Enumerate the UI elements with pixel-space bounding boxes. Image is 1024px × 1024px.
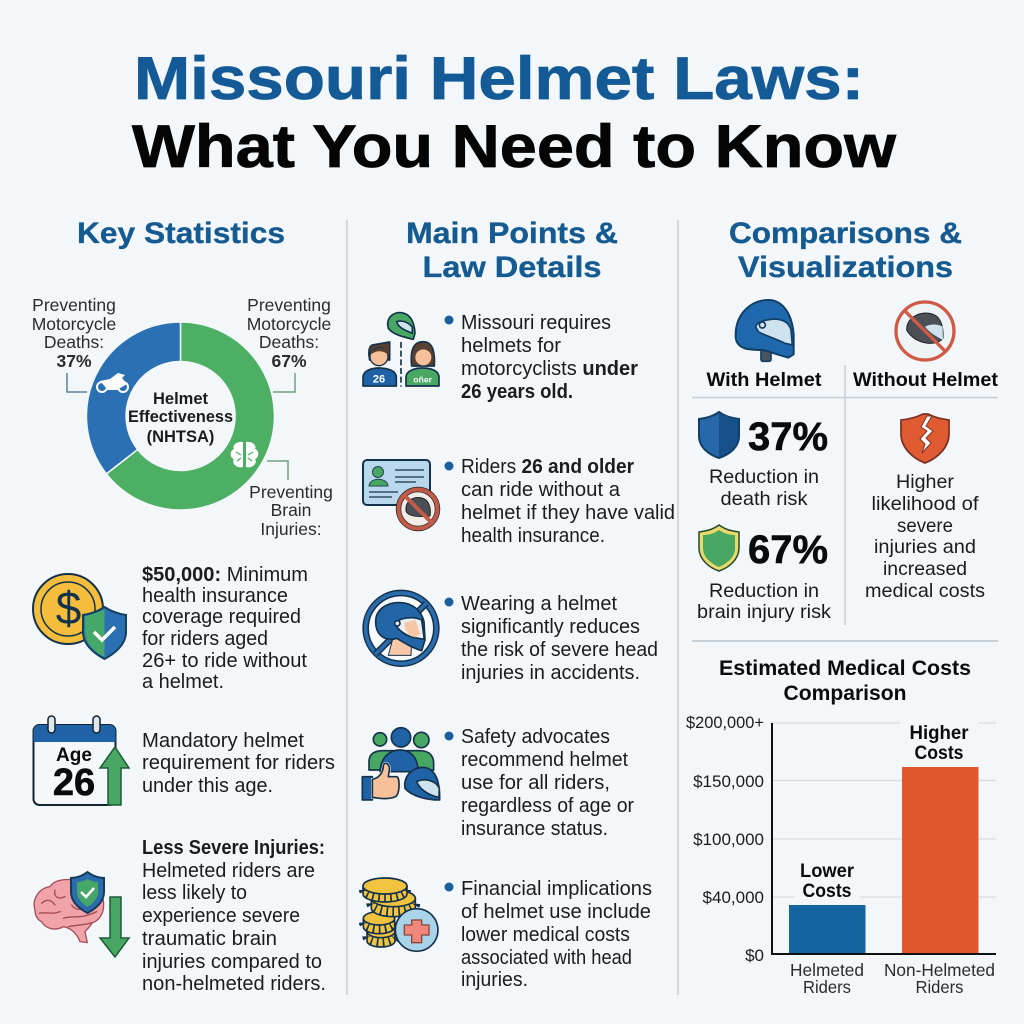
icon: coin and shield: $: [56, 582, 81, 634]
y axis labels: $200,000+: [686, 713, 764, 732]
panel: comparisons and visualizations: [686, 217, 999, 997]
chart title: Comparison: [784, 682, 906, 705]
label: brain injuries: Injuries:: [260, 519, 322, 539]
heading: comparisons: Comparisons &: [729, 217, 962, 250]
text: less severe injuries: non-helmeted riders.: [142, 973, 326, 995]
label: deaths 67%: [247, 295, 331, 371]
donut chart: helmet effectiveness: Helmet: [153, 390, 209, 408]
donut chart: helmet effectiveness: Effectiveness: [128, 408, 233, 426]
text: mandatory requirement: Mandatory helmet: [142, 730, 304, 752]
label: brain injuries: Brain: [271, 500, 311, 520]
bar value labels: Lower: [800, 861, 855, 882]
icon: age 26 calendar with up arrow: 26: [53, 762, 95, 804]
text: riders 26 and older: Riders 26 and older: [461, 456, 634, 478]
label: deaths 67%: 67%: [271, 351, 307, 371]
text: financial implications: injuries.: [461, 969, 528, 991]
x axis labels: Non-Helmeted: [884, 960, 995, 980]
y axis labels: $40,000: [703, 888, 764, 907]
stat: 67% reduction: 67%: [748, 528, 828, 572]
title: What You Need to Know: [132, 113, 896, 180]
x axis labels: Riders: [916, 977, 964, 997]
bar value labels: Costs: [802, 881, 852, 902]
text: without helmet consequence: [865, 471, 985, 602]
icon: coin and shield: [33, 574, 126, 659]
x axis labels: Riders: [803, 977, 851, 997]
y axis labels: $150,000: [693, 772, 764, 791]
text: safety advocates: recommend helmet: [461, 749, 628, 771]
text: riders 26 and older: health insurance.: [461, 525, 605, 547]
text: $50,000 coverage: [142, 564, 308, 693]
text: reduces head injuries: [461, 593, 658, 684]
text: without helmet consequence: Higher: [896, 471, 955, 493]
text: without helmet consequence: medical costs: [865, 580, 985, 602]
text: less severe injuries: less likely to: [142, 882, 247, 904]
icon: riders by age with helmet: 26: [373, 373, 385, 385]
stat: 37% reduction: [699, 412, 828, 510]
icon: age 26 calendar with up arrow: Age: [56, 745, 92, 766]
stat: 37% reduction: 37%: [748, 415, 828, 459]
text: safety advocates: Safety advocates: [461, 726, 610, 748]
bar value labels: [800, 723, 969, 902]
bar value labels: Costs: [914, 743, 964, 764]
donut chart: helmet effectiveness: (NHTSA): [147, 428, 214, 446]
icon: broken shield: [901, 414, 949, 463]
heading: main points: Law Details: [422, 251, 602, 284]
icon: brain: [231, 442, 258, 467]
label: deaths 37%: Deaths:: [44, 332, 104, 352]
panel: main points and law details: [362, 217, 675, 991]
heading: key statistics: Key Statistics: [77, 217, 285, 250]
x axis labels: Helmeted: [790, 960, 864, 980]
y axis labels: [686, 713, 764, 965]
text: financial implications: Financial implications: [461, 878, 652, 900]
icon: id card with no helmet: [363, 460, 438, 528]
title: [132, 45, 896, 180]
text: $50,000 coverage: health insurance: [142, 585, 288, 607]
bullet markers: [444, 316, 454, 892]
column heads: Without Helmet: [853, 370, 999, 391]
text: reduces head injuries: Wearing a helmet: [461, 593, 617, 615]
label: deaths 67%: Deaths:: [259, 332, 319, 352]
text: safety advocates: insurance status.: [461, 818, 608, 840]
heading: comparisons: Visualizations: [738, 251, 953, 284]
text: safety advocates: [461, 726, 634, 840]
text: financial implications: associated with head: [461, 947, 632, 969]
label: deaths 37%: 37%: [56, 351, 92, 371]
text: riders 26 and older: helmet if they have valid: [461, 502, 675, 524]
icon: coin stacks and medical plus: [363, 878, 438, 951]
annotation lines: [67, 373, 295, 480]
text: less severe injuries: Less Severe Injuries:: [142, 837, 325, 859]
heading: main points: [406, 217, 618, 284]
panel: key statistics: [32, 217, 335, 995]
label: deaths 37%: Preventing: [32, 295, 116, 315]
text: financial implications: of helmet use include: [461, 901, 651, 923]
x axis labels: [790, 960, 995, 997]
label: brain injuries: [249, 482, 333, 539]
text: helmets under 26: helmets for: [461, 335, 561, 357]
text: less severe injuries: Helmeted riders are: [142, 860, 315, 882]
label: brain injuries: Preventing: [249, 482, 333, 502]
icon: riders by age with helmet: oñer: [413, 374, 433, 384]
text: reduces head injuries: injuries in accidents.: [461, 662, 640, 684]
stat: 67% reduction: [697, 525, 831, 623]
column heads: With Helmet: [706, 370, 822, 391]
icon: helmeted head in blue ring: [366, 593, 436, 664]
text: without helmet consequence: injuries and: [874, 536, 976, 558]
text: helmets under 26: Missouri requires: [461, 312, 611, 334]
chart title: Estimated Medical Costs: [719, 657, 971, 680]
text: less severe injuries: [142, 837, 326, 995]
text: less severe injuries: injuries compared to: [142, 951, 322, 973]
text: riders 26 and older: can ride without a: [461, 479, 621, 501]
stat: 37% reduction: death risk: [720, 488, 808, 510]
text: reduces head injuries: the risk of severe head: [461, 639, 658, 661]
y axis labels: $0: [745, 946, 764, 965]
bar: non-helmeted riders: [902, 767, 978, 954]
bar value labels: Higher: [910, 723, 969, 744]
icon: group thumbs up and helmet: [362, 728, 440, 800]
text: helmets under 26: [461, 312, 638, 403]
text: mandatory requirement: requirement for riders: [142, 752, 335, 774]
icon: motorcycle: [97, 373, 128, 392]
text: $50,000 coverage: 26+ to ride without: [142, 650, 307, 672]
text: $50,000 coverage: for riders aged: [142, 628, 268, 650]
text: $50,000 coverage: coverage required: [142, 606, 301, 628]
text: financial implications: lower medical costs: [461, 924, 630, 946]
label: deaths 37%: [32, 295, 116, 371]
text: without helmet consequence: severe: [897, 515, 953, 537]
icon: crossed out helmet: [896, 302, 954, 360]
label: deaths 67%: Preventing: [247, 295, 331, 315]
label: deaths 37%: Motorcycle: [32, 314, 116, 334]
y axis labels: $100,000: [693, 830, 764, 849]
text: riders 26 and older: [461, 456, 675, 547]
text: mandatory requirement: [142, 730, 335, 797]
text: without helmet consequence: increased: [883, 558, 967, 580]
heading: comparisons: [729, 217, 962, 284]
text: financial implications: [461, 878, 652, 991]
icon: blue helmet: [736, 300, 794, 361]
bar: helmeted riders: [789, 905, 866, 954]
stat: 67% reduction: Reduction in: [709, 580, 819, 602]
heading: main points: Main Points &: [406, 217, 618, 250]
stat: 37% reduction: Reduction in: [709, 466, 819, 488]
text: helmets under 26: motorcyclists under: [461, 358, 638, 380]
text: safety advocates: regardless of age or: [461, 795, 634, 817]
icon: riders by age with helmet: [363, 313, 439, 387]
label: deaths 67%: Motorcycle: [247, 314, 331, 334]
text: less severe injuries: traumatic brain: [142, 928, 277, 950]
text: safety advocates: use for all riders,: [461, 772, 610, 794]
text: $50,000 coverage: a helmet.: [142, 671, 224, 693]
text: helmets under 26: 26 years old.: [461, 381, 573, 403]
text: reduces head injuries: significantly reduces: [461, 616, 640, 638]
title: Missouri Helmet Laws:: [134, 45, 864, 112]
bar chart: medical costs: [686, 713, 996, 997]
icon: brain with shield and down arrow: [34, 872, 129, 957]
text: $50,000 coverage: $50,000: Minimum: [142, 564, 308, 586]
text: less severe injuries: experience severe: [142, 905, 300, 927]
column heads: [706, 370, 999, 391]
chart title: [719, 657, 971, 705]
icon: age 26 calendar with up arrow: [34, 716, 129, 805]
text: mandatory requirement: under this age.: [142, 775, 273, 797]
stat: 67% reduction: brain injury risk: [697, 601, 831, 623]
text: without helmet consequence: likelihood of: [872, 493, 979, 515]
donut chart: helmet effectiveness: [86, 322, 274, 510]
